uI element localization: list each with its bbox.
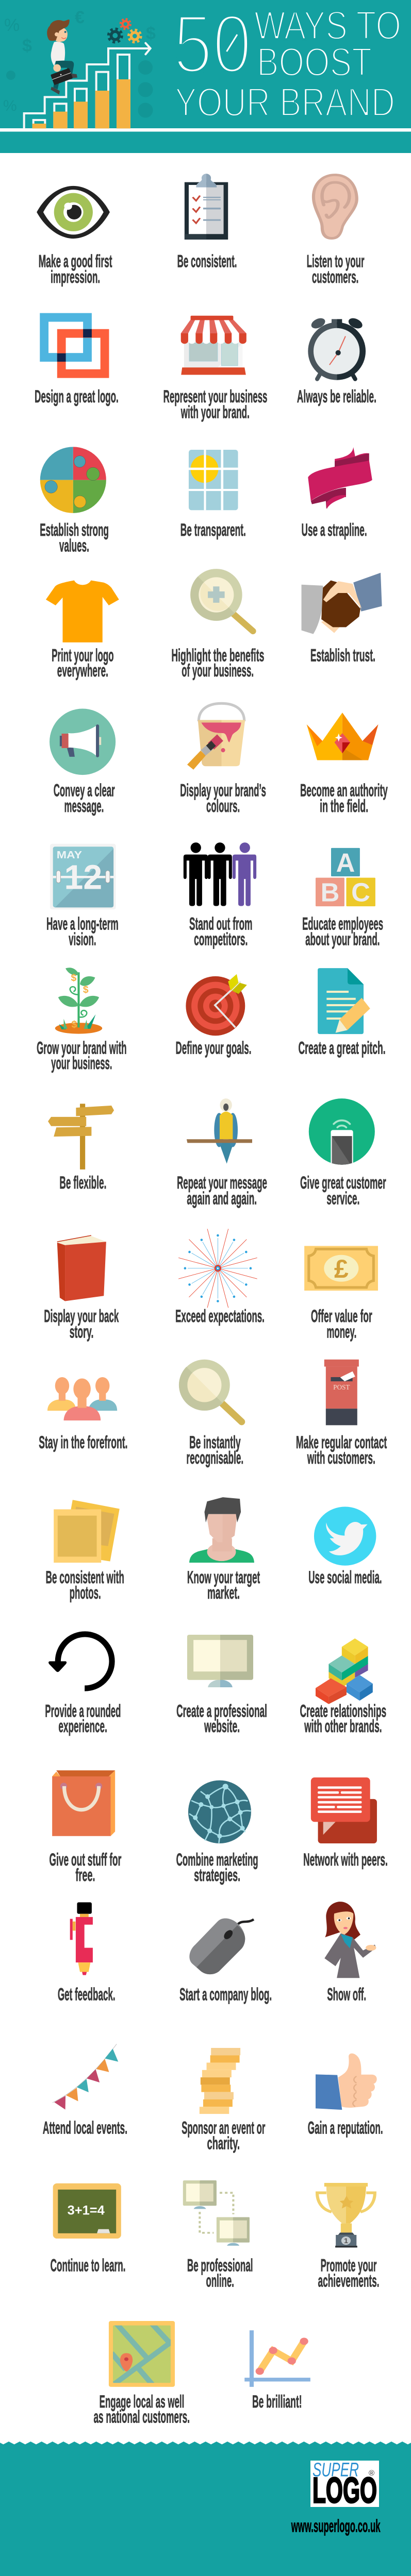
caption: your business. <box>51 1054 112 1073</box>
icon: group of people <box>47 1377 117 1420</box>
caption: Be flexible. <box>59 1173 106 1193</box>
icon: pencil with cap <box>70 1902 93 1975</box>
caption: Define your goals. <box>176 1038 251 1058</box>
caption <box>186 1433 243 1468</box>
caption: Combine marketing <box>176 1850 258 1870</box>
caption: Convey a clear <box>54 781 115 800</box>
caption <box>182 2118 266 2153</box>
item: start a company blog <box>179 1918 272 2004</box>
caption <box>189 914 252 949</box>
caption <box>296 1433 387 1468</box>
item: listen to your customers <box>307 174 365 287</box>
icon: smartphone with wifi <box>309 1098 375 1167</box>
item: make a good first impression <box>37 186 112 287</box>
caption: Highlight the benefits <box>171 646 264 665</box>
icon: calendar: MAY <box>57 850 83 861</box>
item: display your brand's colours <box>180 703 266 816</box>
icon: alphabet blocks: C <box>351 877 370 907</box>
item: be brilliant <box>244 2330 310 2412</box>
caption: photos. <box>70 1583 101 1603</box>
icon: shop <box>181 316 246 375</box>
caption: Use social media. <box>308 1568 382 1587</box>
caption: strategies. <box>194 1866 240 1885</box>
item: become an authority <box>300 713 388 816</box>
caption: Exceed expectations. <box>175 1307 265 1326</box>
item: be consistent with photos <box>45 1500 124 1603</box>
caption <box>300 1173 386 1208</box>
icon: man's head <box>189 1497 254 1563</box>
caption: Design a great logo. <box>35 387 119 406</box>
caption: money. <box>326 1322 356 1342</box>
icon: trophy: 1 <box>344 2238 348 2245</box>
caption: Display your back <box>44 1307 119 1326</box>
caption: Establish strong <box>40 520 109 540</box>
caption: Repeat your message <box>177 1173 267 1193</box>
caption: Create relationships <box>300 1701 386 1721</box>
icon: rotate arrow <box>48 1634 112 1688</box>
caption <box>44 1307 119 1342</box>
faint background icons: € <box>75 8 85 27</box>
caption <box>180 781 266 816</box>
title <box>173 0 401 125</box>
icon: bunting <box>53 2044 118 2110</box>
icon: alarm clock <box>308 316 366 380</box>
icon: magnifier <box>179 1360 242 1422</box>
icon: document and pencil <box>318 968 370 1034</box>
item: represent your business <box>163 316 267 422</box>
item: know your target market <box>187 1497 260 1603</box>
caption: service. <box>326 1189 359 1208</box>
businessman <box>47 20 77 94</box>
icon: money plant <box>55 968 102 1034</box>
item: provide a rounded experience <box>45 1634 121 1736</box>
caption: charity. <box>207 2133 240 2153</box>
icon: thumbs up <box>316 2054 377 2110</box>
caption: Become an authority <box>300 781 388 800</box>
icon: monitor <box>187 1635 253 1687</box>
caption: Be professional <box>187 2256 253 2275</box>
icon: crown <box>307 713 378 760</box>
faint background icons: % <box>4 15 20 35</box>
caption: Create a professional <box>176 1701 267 1721</box>
item: grow your brand <box>37 968 127 1073</box>
caption: Educate employees <box>302 914 383 934</box>
icon: computer mouse <box>189 1918 254 1974</box>
caption <box>54 781 115 816</box>
caption: again and again. <box>187 1189 257 1208</box>
caption: Gain a reputation. <box>308 2118 383 2138</box>
caption: Display your brand’s <box>180 781 266 800</box>
item: give great customer service <box>300 1098 386 1208</box>
icon: chalkboard: 3+1=4 <box>68 2203 105 2217</box>
caption: with customers. <box>307 1448 375 1468</box>
caption: as national customers. <box>93 2407 190 2427</box>
icon: alphabet blocks: B <box>321 877 339 907</box>
item: print your logo everywhere <box>46 581 119 681</box>
caption: with your brand. <box>180 402 250 422</box>
caption: Stand out from <box>189 914 252 934</box>
caption: Listen to your <box>307 251 365 271</box>
icon: chalkboard <box>53 2183 121 2239</box>
icon: ear <box>312 174 358 240</box>
icon: handshake <box>302 573 382 634</box>
item: engage local as well as national customers <box>93 2321 190 2427</box>
item: establish trust <box>302 573 382 665</box>
illustration: businessman climbing bar chart <box>24 19 151 129</box>
item: create a professional website <box>176 1635 267 1736</box>
icon: window with sun <box>189 450 238 510</box>
caption <box>302 914 383 949</box>
caption: free. <box>75 1866 95 1885</box>
panel: footer <box>0 2442 411 2576</box>
caption <box>50 1850 122 1885</box>
item: stay in the forefront <box>39 1377 128 1452</box>
faint background icons: $ <box>146 24 156 43</box>
icon: stack of coins <box>200 2048 240 2114</box>
caption: message. <box>64 796 104 816</box>
gears <box>108 19 141 42</box>
icon: bird in a circle <box>314 1506 376 1566</box>
caption <box>307 251 365 287</box>
faint background icons: $ <box>22 36 32 56</box>
caption <box>45 1701 121 1736</box>
icon: calendar: 12 <box>64 858 102 897</box>
caption: Always be reliable. <box>297 387 376 406</box>
website address: www.superlogo.co.uk <box>291 2516 381 2536</box>
caption <box>39 251 112 287</box>
caption: Be brilliant! <box>252 2392 302 2412</box>
caption: Engage local as well <box>100 2392 184 2412</box>
icon: money plant: $ <box>71 972 76 984</box>
faint background icons: % <box>3 97 17 114</box>
item: establish strong values <box>40 447 109 555</box>
caption: Use a strapline. <box>302 520 367 540</box>
icon: eye <box>37 186 110 239</box>
icon: network globe <box>188 1781 251 1843</box>
icon: post box <box>324 1360 359 1425</box>
caption: Establish trust. <box>310 646 375 665</box>
caption: Offer value for <box>311 1307 372 1326</box>
caption: everywhere. <box>57 661 108 681</box>
caption: competitors. <box>194 929 248 949</box>
caption: Give out stuff for <box>50 1850 122 1870</box>
icon: photos <box>54 1500 120 1563</box>
faint background icons <box>3 8 156 117</box>
item: create a great pitch <box>298 968 386 1058</box>
icon: overlapping squares <box>44 317 105 374</box>
icon: megaphone <box>50 709 116 775</box>
caption: Be consistent with <box>45 1568 124 1587</box>
caption: Have a long-term <box>46 914 119 934</box>
caption <box>187 1568 260 1603</box>
item: convey a clear message <box>50 709 116 816</box>
icon: calendar <box>50 844 116 909</box>
icon: clipboard checklist <box>185 174 228 240</box>
icon: post box: POST <box>333 1383 350 1391</box>
icon: building bricks <box>316 1638 373 1704</box>
caption <box>45 1568 124 1603</box>
icon: line chart <box>244 2330 310 2387</box>
caption: story. <box>70 1322 93 1342</box>
caption: Provide a rounded <box>45 1701 121 1721</box>
caption: Show off. <box>327 1985 366 2004</box>
caption: achievements. <box>318 2271 380 2291</box>
icon: parrot <box>187 1098 252 1164</box>
item: always be reliable <box>297 316 376 406</box>
icon: signpost <box>48 1104 114 1170</box>
item: sponsor an event <box>182 2048 266 2153</box>
item: give out stuff for free <box>50 1770 122 1885</box>
caption: values. <box>59 536 89 555</box>
stair arrow <box>24 43 151 129</box>
caption: Be instantly <box>189 1433 241 1452</box>
item: design a great logo <box>35 317 119 406</box>
logo: Super Logo: SUPER <box>313 2460 359 2481</box>
bars <box>32 55 130 128</box>
caption: Get feedback. <box>58 1985 116 2004</box>
item: educate employees <box>302 848 383 949</box>
icon: paint bucket and brush <box>187 703 245 770</box>
caption <box>93 2392 190 2427</box>
icon: speech bubbles <box>311 1777 377 1843</box>
ground line <box>0 128 411 132</box>
caption: Network with peers. <box>303 1850 388 1870</box>
caption: market. <box>207 1583 240 1603</box>
item: continue to learn <box>51 2183 125 2275</box>
caption <box>163 387 267 422</box>
item: use a strapline <box>302 447 372 540</box>
item: promote your achievements <box>317 2183 380 2291</box>
item: use social media <box>308 1506 382 1587</box>
icon: money plant: $ <box>83 984 89 995</box>
caption: Make a good first <box>39 251 112 271</box>
caption <box>318 2256 380 2291</box>
logo: Super Logo: ® <box>369 2469 374 2478</box>
caption: Be consistent. <box>177 251 237 271</box>
caption: website. <box>204 1717 240 1736</box>
icon: book <box>57 1235 106 1301</box>
item: exceed expectations <box>175 1229 265 1326</box>
caption: colours. <box>206 796 240 816</box>
item: get feedback <box>58 1902 116 2004</box>
caption: recognisable. <box>186 1448 243 1468</box>
item: offer value for money <box>304 1246 378 1342</box>
caption <box>300 1701 386 1736</box>
icon: magnifier with plus <box>190 569 253 631</box>
icon: three figures <box>184 842 256 906</box>
icon: target <box>186 974 247 1036</box>
caption <box>52 646 114 681</box>
caption: Sponsor an event or <box>182 2118 266 2138</box>
caption: Start a company blog. <box>179 1985 272 2004</box>
caption <box>311 1307 372 1342</box>
caption <box>300 781 388 816</box>
caption: of your business. <box>182 661 254 681</box>
item: be transparent <box>180 450 246 540</box>
caption: Stay in the forefront. <box>39 1433 128 1452</box>
caption: Attend local events. <box>43 2118 127 2138</box>
caption <box>177 1173 267 1208</box>
item: repeat your message <box>177 1098 267 1208</box>
icon: trophy <box>317 2183 375 2247</box>
caption: Give great customer <box>300 1173 386 1193</box>
caption: Continue to learn. <box>51 2256 125 2275</box>
panel: header banner <box>0 0 411 153</box>
icon: ribbon <box>308 447 372 509</box>
icon: businesswoman <box>324 1902 376 1978</box>
item: network with peers <box>303 1777 388 1870</box>
caption <box>37 1038 127 1073</box>
caption: Promote your <box>321 2256 377 2275</box>
icon: alphabet blocks <box>316 848 375 907</box>
icon: puzzle <box>40 447 106 513</box>
icon: two connected monitors <box>183 2180 250 2246</box>
caption: online. <box>206 2271 234 2291</box>
caption: Grow your brand with <box>37 1038 127 1058</box>
caption: in the field. <box>320 796 368 816</box>
icon: alphabet blocks: A <box>336 848 355 877</box>
item: be professional online <box>183 2180 253 2291</box>
item: be flexible <box>48 1104 114 1193</box>
item: combine marketing strategies <box>176 1781 258 1885</box>
item: be consistent <box>177 174 237 271</box>
caption: Be transparent. <box>180 520 246 540</box>
caption: Create a great pitch. <box>298 1038 386 1058</box>
caption <box>187 2256 253 2291</box>
caption: Know your target <box>187 1568 260 1587</box>
title: BOOST <box>257 39 372 84</box>
icon: t-shirt <box>46 581 119 642</box>
item: display your back story <box>44 1235 119 1342</box>
item: define your goals <box>176 974 251 1058</box>
item: highlight the benefits <box>171 569 264 681</box>
caption: experience. <box>58 1717 107 1736</box>
icon: money plant: $ <box>71 1019 77 1030</box>
icon: shopping bag <box>52 1770 115 1836</box>
caption <box>46 914 119 949</box>
icon: map with pin <box>109 2321 175 2387</box>
caption: vision. <box>69 929 96 949</box>
icon: banknote: £ <box>334 1255 349 1283</box>
caption: impression. <box>51 267 100 287</box>
caption: with other brands. <box>304 1717 382 1736</box>
caption <box>171 646 264 681</box>
icon: firework burst <box>178 1229 257 1308</box>
caption: customers. <box>312 267 358 287</box>
item: create relationships <box>300 1638 386 1736</box>
item: make regular contact <box>296 1360 387 1468</box>
item: show off <box>324 1902 376 2004</box>
item: be instantly recognisable <box>179 1360 243 1468</box>
title: 50 <box>173 0 252 91</box>
icon: banknote <box>304 1246 378 1291</box>
item: have a long-term vision <box>46 844 119 949</box>
caption: Print your logo <box>52 646 114 665</box>
item: attend local events <box>43 2044 127 2138</box>
logo: Super Logo <box>310 2460 379 2510</box>
caption <box>176 1701 267 1736</box>
item: gain a reputation <box>308 2054 383 2138</box>
item: stand out from competitors <box>184 842 256 949</box>
caption: Make regular contact <box>296 1433 387 1452</box>
caption: Represent your business <box>163 387 267 406</box>
caption <box>40 520 109 555</box>
caption <box>176 1850 258 1885</box>
caption: about your brand. <box>305 929 380 949</box>
